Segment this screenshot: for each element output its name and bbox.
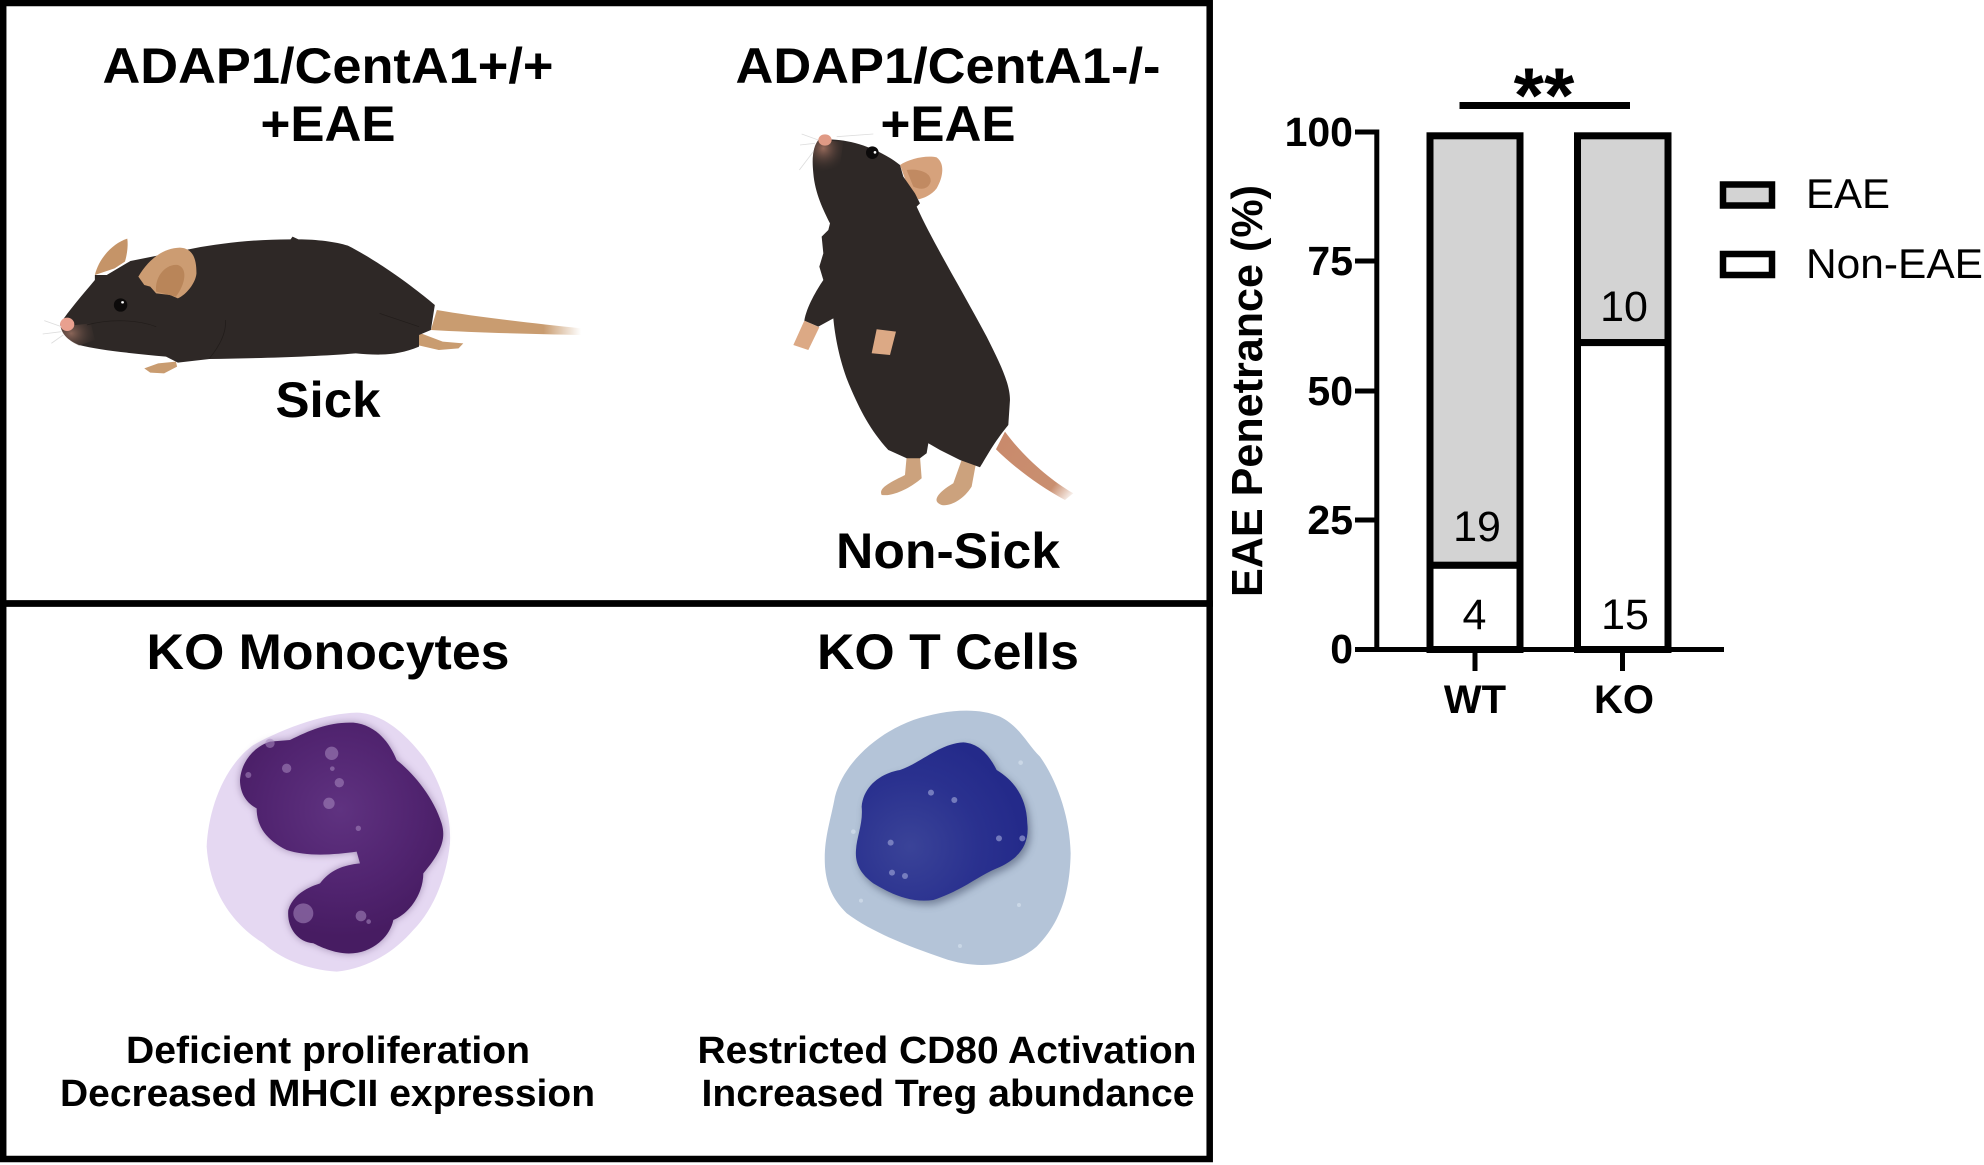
heading: knockout mouse: +EAE [880,96,1016,152]
significance bracket [1460,51,1630,139]
heading: knockout mouse: ADAP1/CentA1-/- [736,38,1160,94]
heading: wild type mouse [102,38,554,152]
bar: KO: 10 [1600,283,1648,331]
text: monocyte findings [60,1030,595,1115]
label: sick: Sick [276,372,381,428]
panel: cell phenotypes frame [3,604,1210,1159]
y tick labels: 100 [1285,109,1353,155]
bar: KO: 15 [1601,591,1649,639]
text: monocyte findings: Decreased MHCII expression [60,1073,595,1115]
heading: KO T cells: KO T Cells [817,624,1079,680]
heading: wild type mouse: +EAE [260,96,396,152]
bar: KO [1578,136,1668,650]
icon: healthy mouse standing [793,134,1073,505]
y axis [1355,130,1724,671]
bar: WT [1430,136,1520,650]
x tick labels [1444,678,1654,722]
heading: KO monocytes: KO Monocytes [146,624,510,680]
y tick labels [1285,109,1353,672]
y tick labels: 0 [1330,626,1353,672]
x tick labels: KO [1594,678,1654,722]
text: T cell findings [698,1030,1196,1115]
text: T cell findings: Restricted CD80 Activation [698,1030,1196,1072]
text: T cell findings: Increased Treg abundance [702,1073,1194,1115]
y axis title: EAE Penetrance (%) [1223,185,1272,597]
panel: mouse comparison frame [3,3,1210,604]
icon: T cell [825,711,1071,965]
y tick labels: 50 [1307,368,1353,414]
x tick labels: WT [1444,678,1506,722]
legend [1723,170,1983,287]
bar: WT: 4 [1463,591,1486,639]
y tick labels: 75 [1307,238,1353,284]
bar: WT: 19 [1453,503,1501,551]
heading: knockout mouse [736,38,1160,152]
significance bracket: ** [1514,51,1575,139]
label: non-sick: Non-Sick [836,523,1060,579]
chart: EAE penetrance stacked bars [1223,51,1983,722]
icon: sick mouse lying down [43,237,581,373]
legend: Non-EAE [1806,240,1983,287]
legend: EAE [1806,170,1890,217]
y tick labels: 25 [1307,497,1353,543]
icon: monocyte [207,713,450,972]
text: monocyte findings: Deficient proliferation [126,1030,530,1072]
heading: wild type mouse: ADAP1/CentA1+/+ [102,38,554,94]
